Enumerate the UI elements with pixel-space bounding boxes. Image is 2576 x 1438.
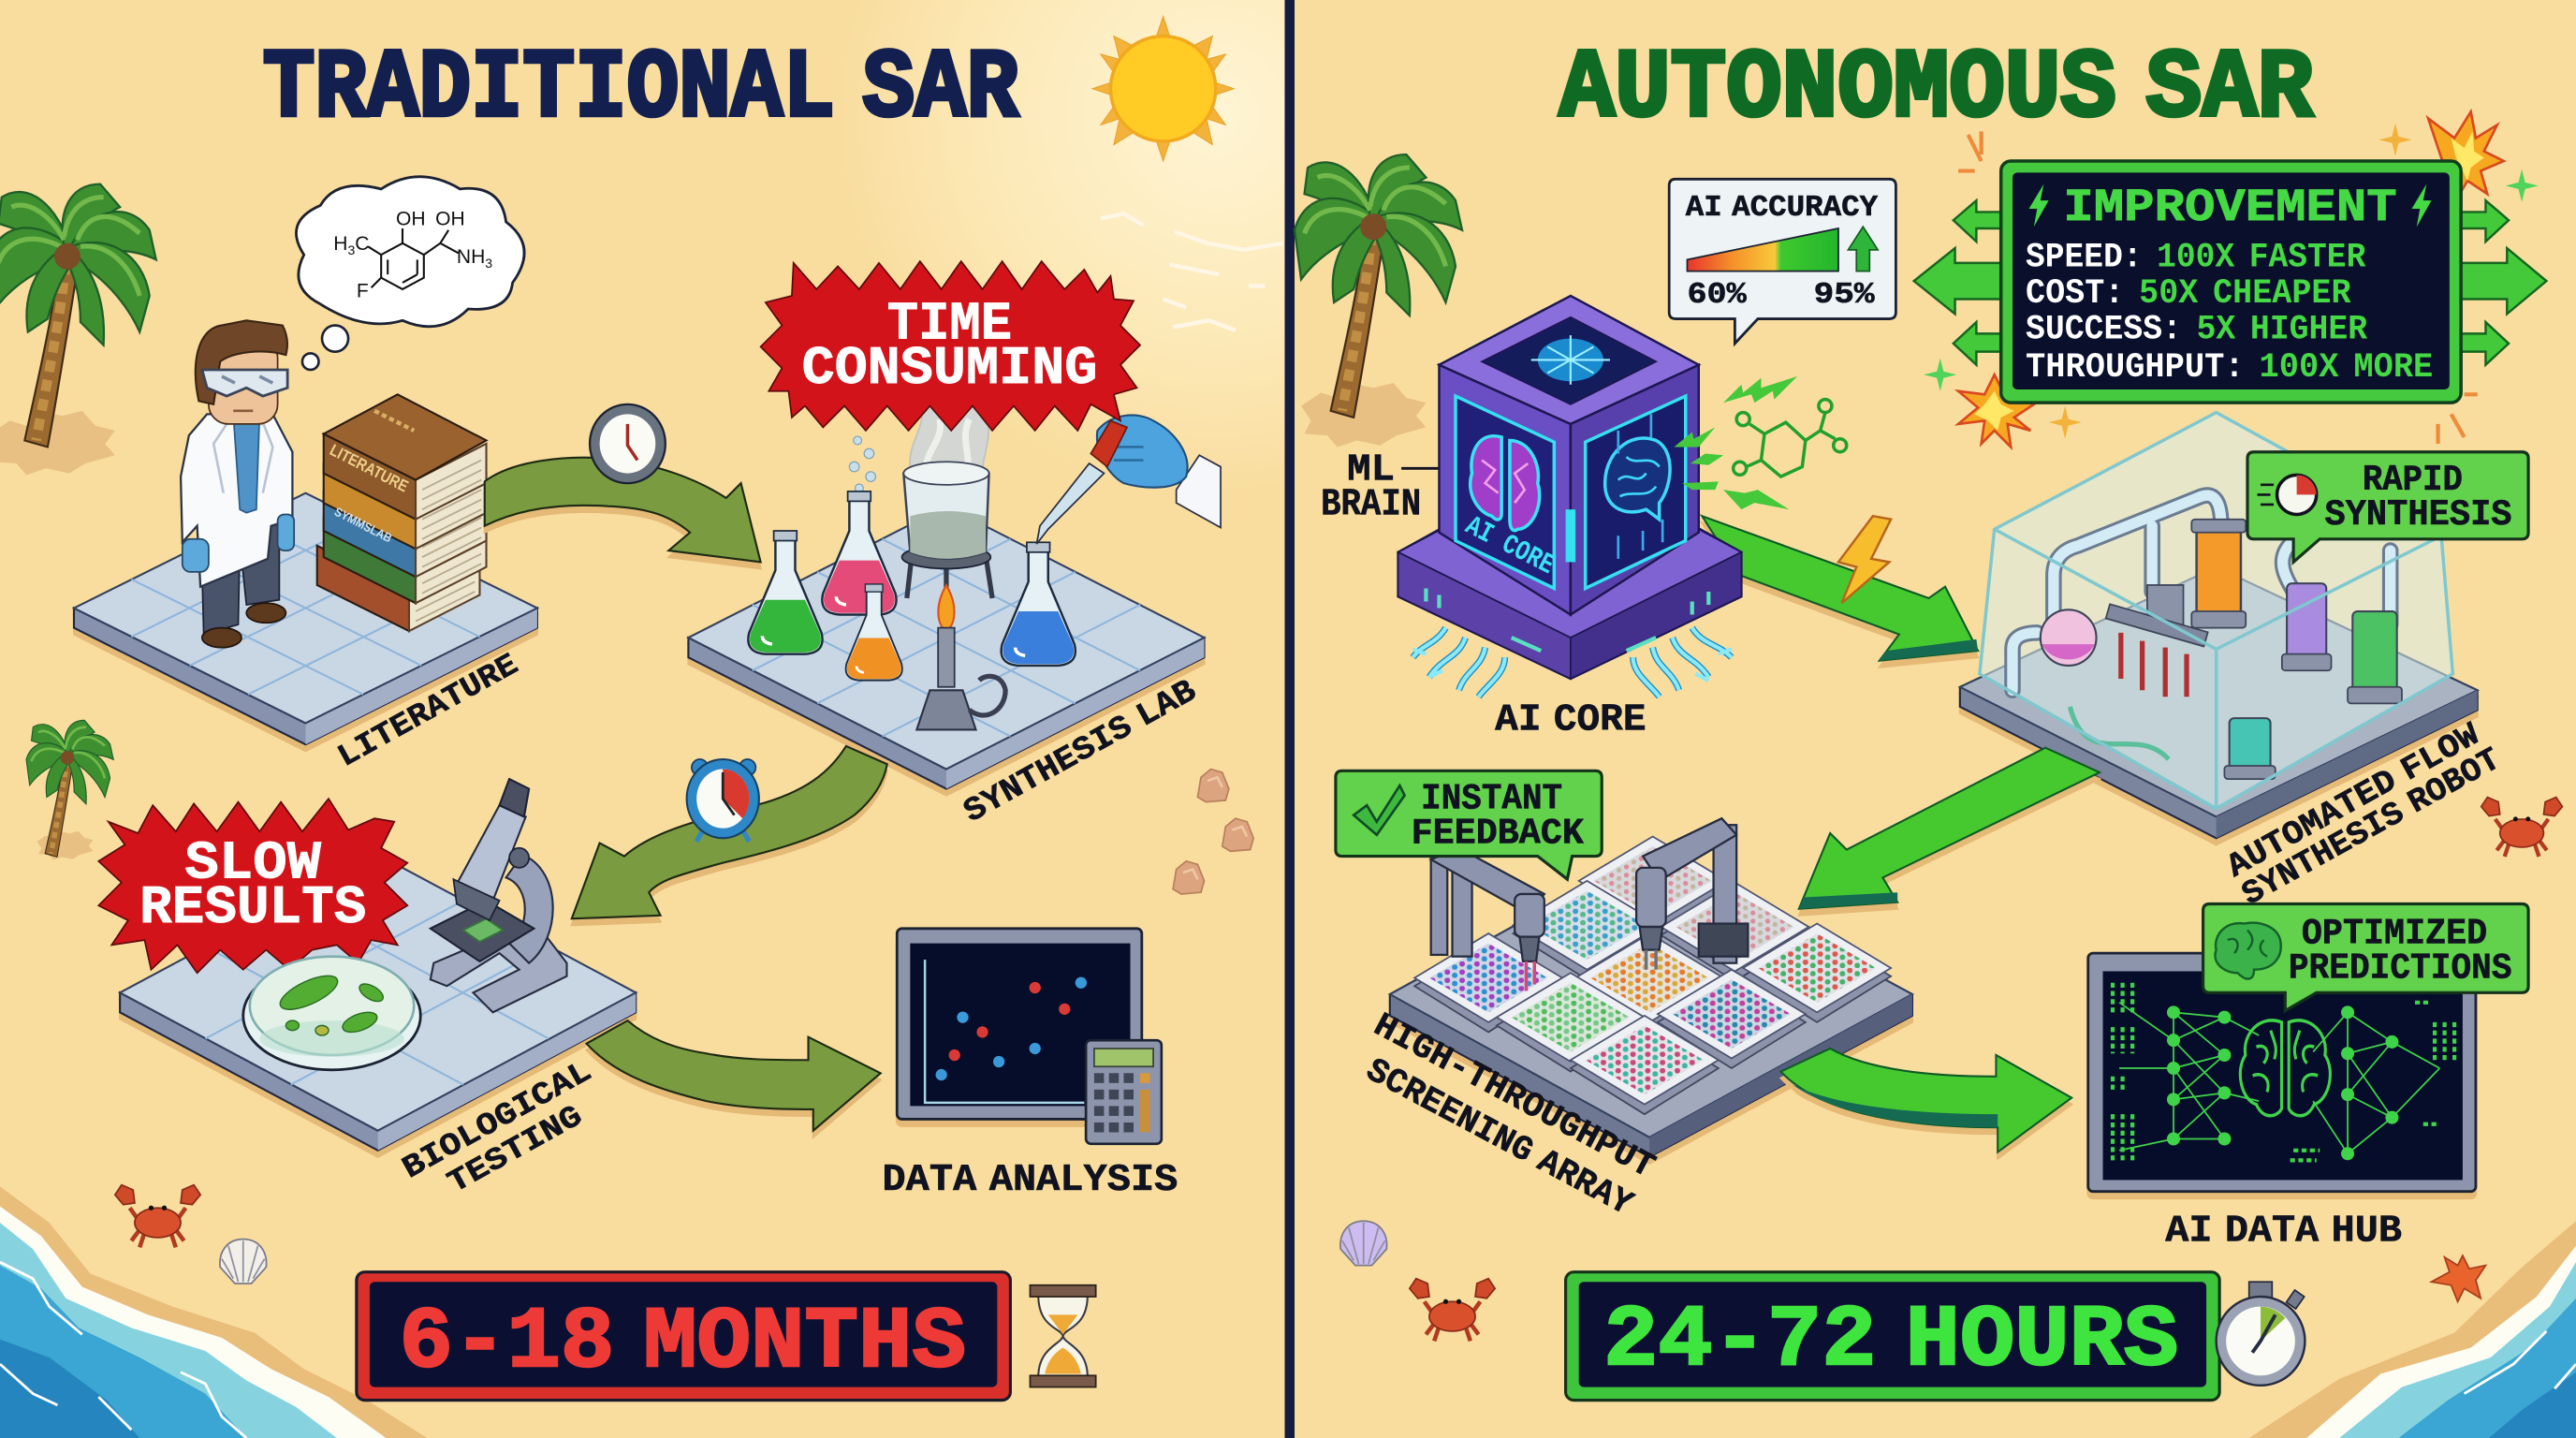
flasks [748, 492, 1076, 681]
platform: high-throughput screening array [1390, 851, 1912, 1157]
icon: seashell [220, 1240, 267, 1284]
icon: alarm clock [687, 759, 759, 842]
callout: instant feedback: FEEDBACK [1412, 814, 1585, 855]
arrow: synthesis to screening [1799, 748, 2100, 909]
label: automated flow: AUTOMATED FLOW [2220, 716, 2487, 886]
label: AI data hub: AI DATA HUB [2165, 1210, 2402, 1253]
label: synthesis robot: SYNTHESIS ROBOT [2236, 741, 2507, 914]
callout: optimized predictions [2203, 903, 2528, 1011]
title: Traditional SAR: TRADITIONAL SAR [263, 36, 1019, 145]
label: testing: TESTING [442, 1099, 589, 1202]
arrows: improvement radiating [1914, 200, 2546, 365]
arrow: literature to synthesis [485, 458, 761, 562]
books stack: SYMMSLAB [332, 505, 394, 545]
hand with pipette [1036, 415, 1221, 544]
timer: 24-72 hours [1566, 1272, 2219, 1401]
scientist [181, 320, 294, 648]
palm tree: right panel [1295, 154, 1462, 447]
panel: improvement stats [2001, 161, 2461, 403]
callout: slow results: SLOW [184, 833, 321, 894]
petri dish [243, 957, 420, 1070]
callout: AI accuracy gauge: 60% [1687, 279, 1747, 312]
AI core cube: AI CORE [1460, 509, 1559, 581]
timer: 6-18 months [357, 1272, 1010, 1401]
thought cloud with molecule: F [357, 281, 369, 302]
waves: bottom left [0, 1186, 427, 1438]
icon: stopwatch [2217, 1282, 2305, 1386]
burst: improvement bottom left [1924, 359, 2082, 447]
callout: rapid synthesis: RAPID [2363, 460, 2463, 501]
icon: sun [1092, 17, 1234, 161]
title: Autonomous SAR: AUTONOMOUS SAR [1559, 36, 2314, 145]
callout: slow results: RESULTS [139, 878, 366, 939]
thought cloud with molecule: 3 [347, 242, 355, 257]
thought cloud with molecule: H [333, 233, 347, 255]
callout: optimized predictions: PREDICTIONS [2289, 947, 2512, 989]
panel: improvement stats: COST: 50X CHEAPER [2026, 274, 2351, 314]
label: data analysis: DATA ANALYSIS [882, 1159, 1178, 1202]
icon: purple seashell [1340, 1221, 1387, 1266]
callout: time consuming [761, 261, 1140, 431]
callout: AI accuracy gauge: 95% [1814, 279, 1875, 312]
bunsen burner [916, 585, 1005, 729]
callout: optimized predictions: OPTIMIZED [2302, 914, 2487, 955]
icon: calculator [1086, 1040, 1162, 1144]
platform: biological testing [120, 855, 636, 1151]
icon: crab lower [1410, 1279, 1495, 1341]
callout: AI accuracy gauge: AI ACCURACY [1686, 192, 1878, 225]
panel: improvement stats: SUCCESS: 5X HIGHER [2026, 311, 2368, 350]
platform: synthesis lab [688, 506, 1204, 789]
thought cloud with molecule: 3 [485, 256, 492, 271]
thought cloud with molecule: NH [457, 246, 485, 268]
icon: hourglass [1030, 1285, 1096, 1387]
waves: bottom right [2249, 1221, 2576, 1438]
callout: time consuming: TIME [887, 295, 1012, 356]
label: literature: LITERATURE [332, 648, 525, 776]
molecule: green output [1674, 376, 1847, 509]
well plates [1414, 837, 1891, 1114]
AI data hub monitor [2088, 953, 2476, 1192]
panel: autonomous SAR [1295, 36, 2576, 1438]
rocks [1173, 770, 1253, 894]
callout: slow results [98, 799, 407, 973]
thought cloud with molecule [296, 177, 524, 370]
microscope [431, 779, 567, 1012]
label: screening array: SCREENING ARRAY [1359, 1051, 1639, 1225]
label: AI core: AI CORE [1495, 698, 1647, 741]
robot gantries [1431, 818, 1748, 991]
icon: crab left [115, 1185, 200, 1247]
palm tree: large left [0, 184, 156, 475]
panel: improvement stats: IMPROVEMENT [2063, 182, 2397, 234]
label: ML brain [1321, 449, 1442, 526]
arrow: testing to data analysis [587, 1020, 881, 1131]
callout: rapid synthesis: SYNTHESIS [2324, 494, 2512, 536]
icon: crab right [2481, 798, 2562, 857]
panel: improvement stats: THROUGHPUT: 100X MORE [2026, 348, 2433, 388]
panel: traditional SAR [0, 17, 1283, 1438]
label: ML brain: ML [1347, 449, 1395, 492]
flow reactor: glass box [1980, 413, 2452, 809]
callout: time consuming: CONSUMING [801, 339, 1097, 400]
icon: wall clock [590, 404, 666, 483]
label: biological testing: BIOLOGICAL [397, 1054, 598, 1187]
platform: flow synthesis robot [1960, 567, 2478, 838]
books stack: LITERATURE [327, 440, 412, 496]
callout: AI accuracy gauge [1669, 179, 1895, 344]
callout: rapid synthesis [2247, 452, 2528, 562]
books stack [317, 394, 487, 631]
sun glow [690, 0, 1284, 526]
platform: literature [74, 493, 537, 744]
burst: improvement top right [1958, 111, 2539, 444]
surf marks [1101, 213, 1283, 330]
label: synthesis lab: SYNTHESIS LAB [958, 672, 1203, 831]
label: ML brain: BRAIN [1321, 483, 1421, 526]
icon: lightning bolt [1838, 516, 1891, 603]
thought cloud with molecule: OH [396, 208, 426, 229]
divider between panels [1284, 0, 1295, 1438]
palm tree: small left [26, 720, 113, 860]
timer: 24-72 hours: 24-72 HOURS [1603, 1292, 2178, 1390]
callout: instant feedback: INSTANT [1421, 779, 1562, 820]
AI core cube [1398, 296, 1741, 697]
timer: 6-18 months: 6-18 MONTHS [399, 1294, 966, 1392]
thought cloud with molecule: C [355, 233, 370, 255]
arrow: synthesis to biological testing [572, 746, 887, 918]
label: high-throughput: HIGH-THROUGHPUT [1367, 1006, 1661, 1188]
panel: improvement stats: SPEED: 100X FASTER [2026, 238, 2366, 277]
icon: starfish [2432, 1255, 2485, 1301]
callout: instant feedback [1336, 770, 1602, 879]
thought cloud with molecule: OH [435, 208, 465, 229]
monitor: scatter plot [897, 929, 1142, 1119]
arrow: screening to data hub [1781, 1049, 2071, 1152]
beaker on stand with smoke [849, 403, 992, 598]
arrow: AI core to synthesis [1702, 516, 1978, 661]
